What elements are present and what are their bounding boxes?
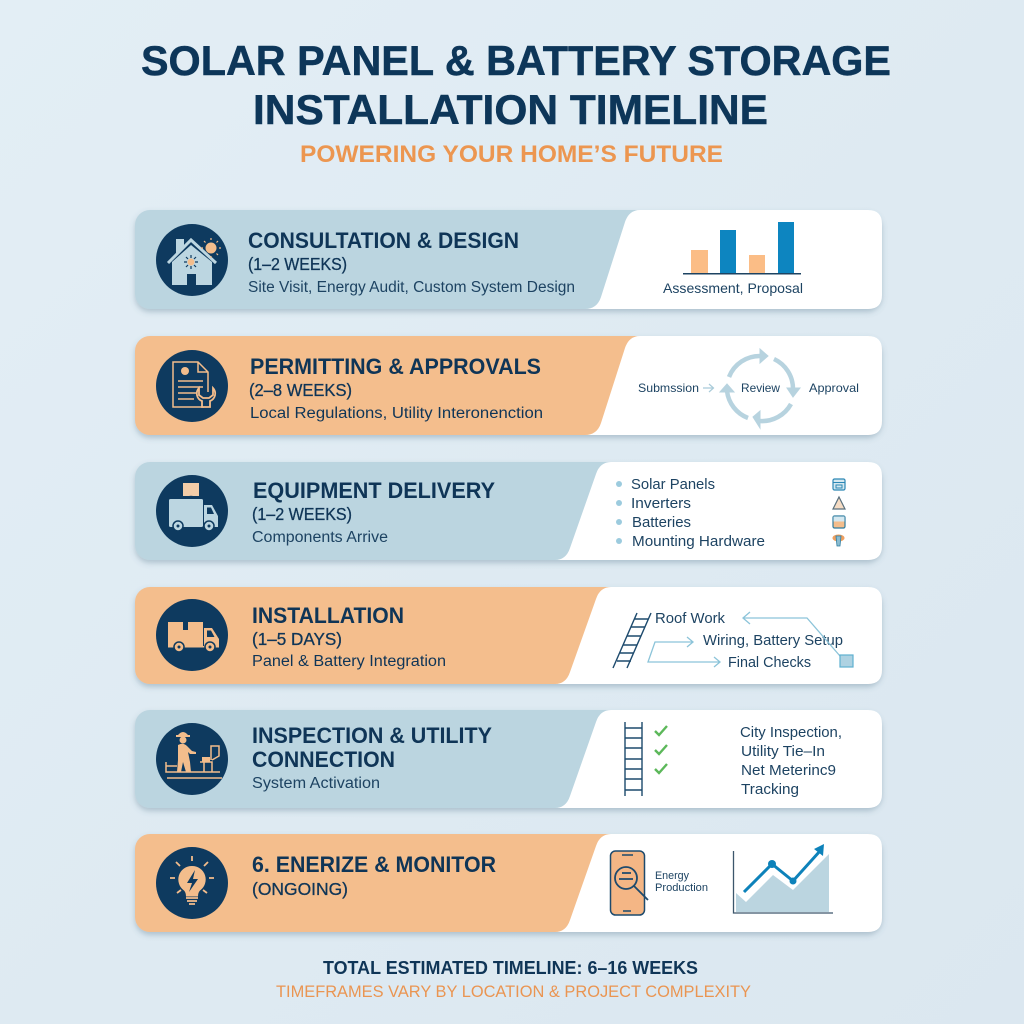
heading: permitting: PERMITTING & APPROVALS	[250, 354, 541, 379]
icon: inverter	[833, 497, 845, 509]
process label: approval: Approval	[809, 381, 859, 395]
arrow	[703, 384, 714, 392]
icon: solar panel	[833, 479, 845, 490]
icon: phone with magnifier	[610, 851, 648, 915]
panel: step 6 energize and monitor	[135, 834, 882, 932]
description: Components Arrive	[252, 529, 388, 546]
label: wiring, battery setup: Wiring, Battery Setup	[703, 632, 843, 649]
component list: Inverters	[631, 495, 691, 512]
inspection list: Tracking	[741, 781, 799, 798]
title: SOLAR PANEL & BATTERY STORAGE	[141, 37, 891, 84]
title: INSTALLATION TIMELINE	[253, 86, 768, 133]
inspection list: Net Meterinc9	[741, 762, 836, 779]
area chart with trend arrow	[734, 844, 833, 913]
label: energy production: Energy	[655, 870, 689, 882]
icon: mounting hardware	[832, 534, 844, 546]
label: roof work: Roof Work	[655, 610, 725, 627]
flow arrows	[648, 612, 840, 667]
description: Site Visit, Energy Audit, Custom System Design	[248, 279, 575, 296]
subtitle: POWERING YOUR HOME’S FUTURE	[300, 141, 723, 168]
label: energy production	[655, 870, 708, 894]
duration: (ONGOING)	[252, 879, 348, 899]
heading: installation: INSTALLATION	[252, 603, 404, 628]
heading: inspection	[252, 723, 492, 772]
heading: energize: 6. ENERIZE & MONITOR	[252, 852, 496, 877]
description: System Activation	[252, 775, 380, 792]
icon: delivery truck with package	[156, 475, 228, 547]
icon: document with wrench	[156, 350, 228, 422]
component list: Solar Panels	[631, 476, 715, 493]
icon: ladder	[625, 722, 642, 796]
icon: house with sun	[156, 224, 228, 296]
footer: note: TIMEFRAMES VARY BY LOCATION & PROJECT COMPLEXITY	[276, 982, 751, 1001]
panel: step 1 consultation and design	[135, 210, 882, 309]
heading: equipment: EQUIPMENT DELIVERY	[253, 478, 495, 503]
description: Panel & Battery Integration	[252, 653, 446, 670]
component list: Batteries	[632, 514, 691, 531]
inspection list	[740, 724, 842, 798]
bar chart	[683, 222, 801, 274]
panel: step 3 equipment delivery	[135, 462, 882, 560]
process label: review: Review	[741, 381, 780, 395]
duration: (1–2 WEEKS)	[248, 254, 347, 274]
component list: Mounting Hardware	[632, 533, 765, 550]
icon: light bulb	[156, 847, 228, 919]
panel: step 5 inspection	[135, 710, 882, 808]
inspection list: City Inspection,	[740, 724, 842, 741]
icon: worker on roof	[156, 723, 228, 795]
heading: inspection: CONNECTION	[252, 747, 395, 772]
footer: total timeline: TOTAL ESTIMATED TIMELINE: 6–16 WEEKS	[323, 958, 698, 978]
chart caption: Assessment, Proposal	[663, 280, 803, 296]
process label: submission: Submssion	[638, 381, 699, 395]
icon: ladder	[613, 613, 651, 668]
label: energy production: Production	[655, 882, 708, 894]
title	[141, 37, 891, 133]
inspection list: Utility Tie–In	[741, 743, 825, 760]
duration: (1–5 DAYS)	[252, 629, 342, 649]
icon: end square	[840, 655, 853, 667]
component list	[616, 476, 765, 550]
panel: step 4 installation	[135, 587, 882, 684]
duration: (2–8 WEEKS)	[249, 380, 352, 400]
heading: inspection: INSPECTION & UTILITY	[252, 723, 492, 748]
label: final checks: Final Checks	[728, 654, 811, 671]
icon: battery	[833, 516, 845, 528]
heading: consultation: CONSULTATION & DESIGN	[248, 228, 519, 253]
checkmarks	[655, 726, 667, 773]
cycle arrows	[720, 349, 800, 428]
panel: step 2 permitting	[135, 336, 882, 435]
icon: truck with box	[156, 599, 228, 671]
description: Local Regulations, Utility Interonenction	[250, 405, 543, 422]
duration: (1–2 WEEKS)	[252, 504, 352, 524]
